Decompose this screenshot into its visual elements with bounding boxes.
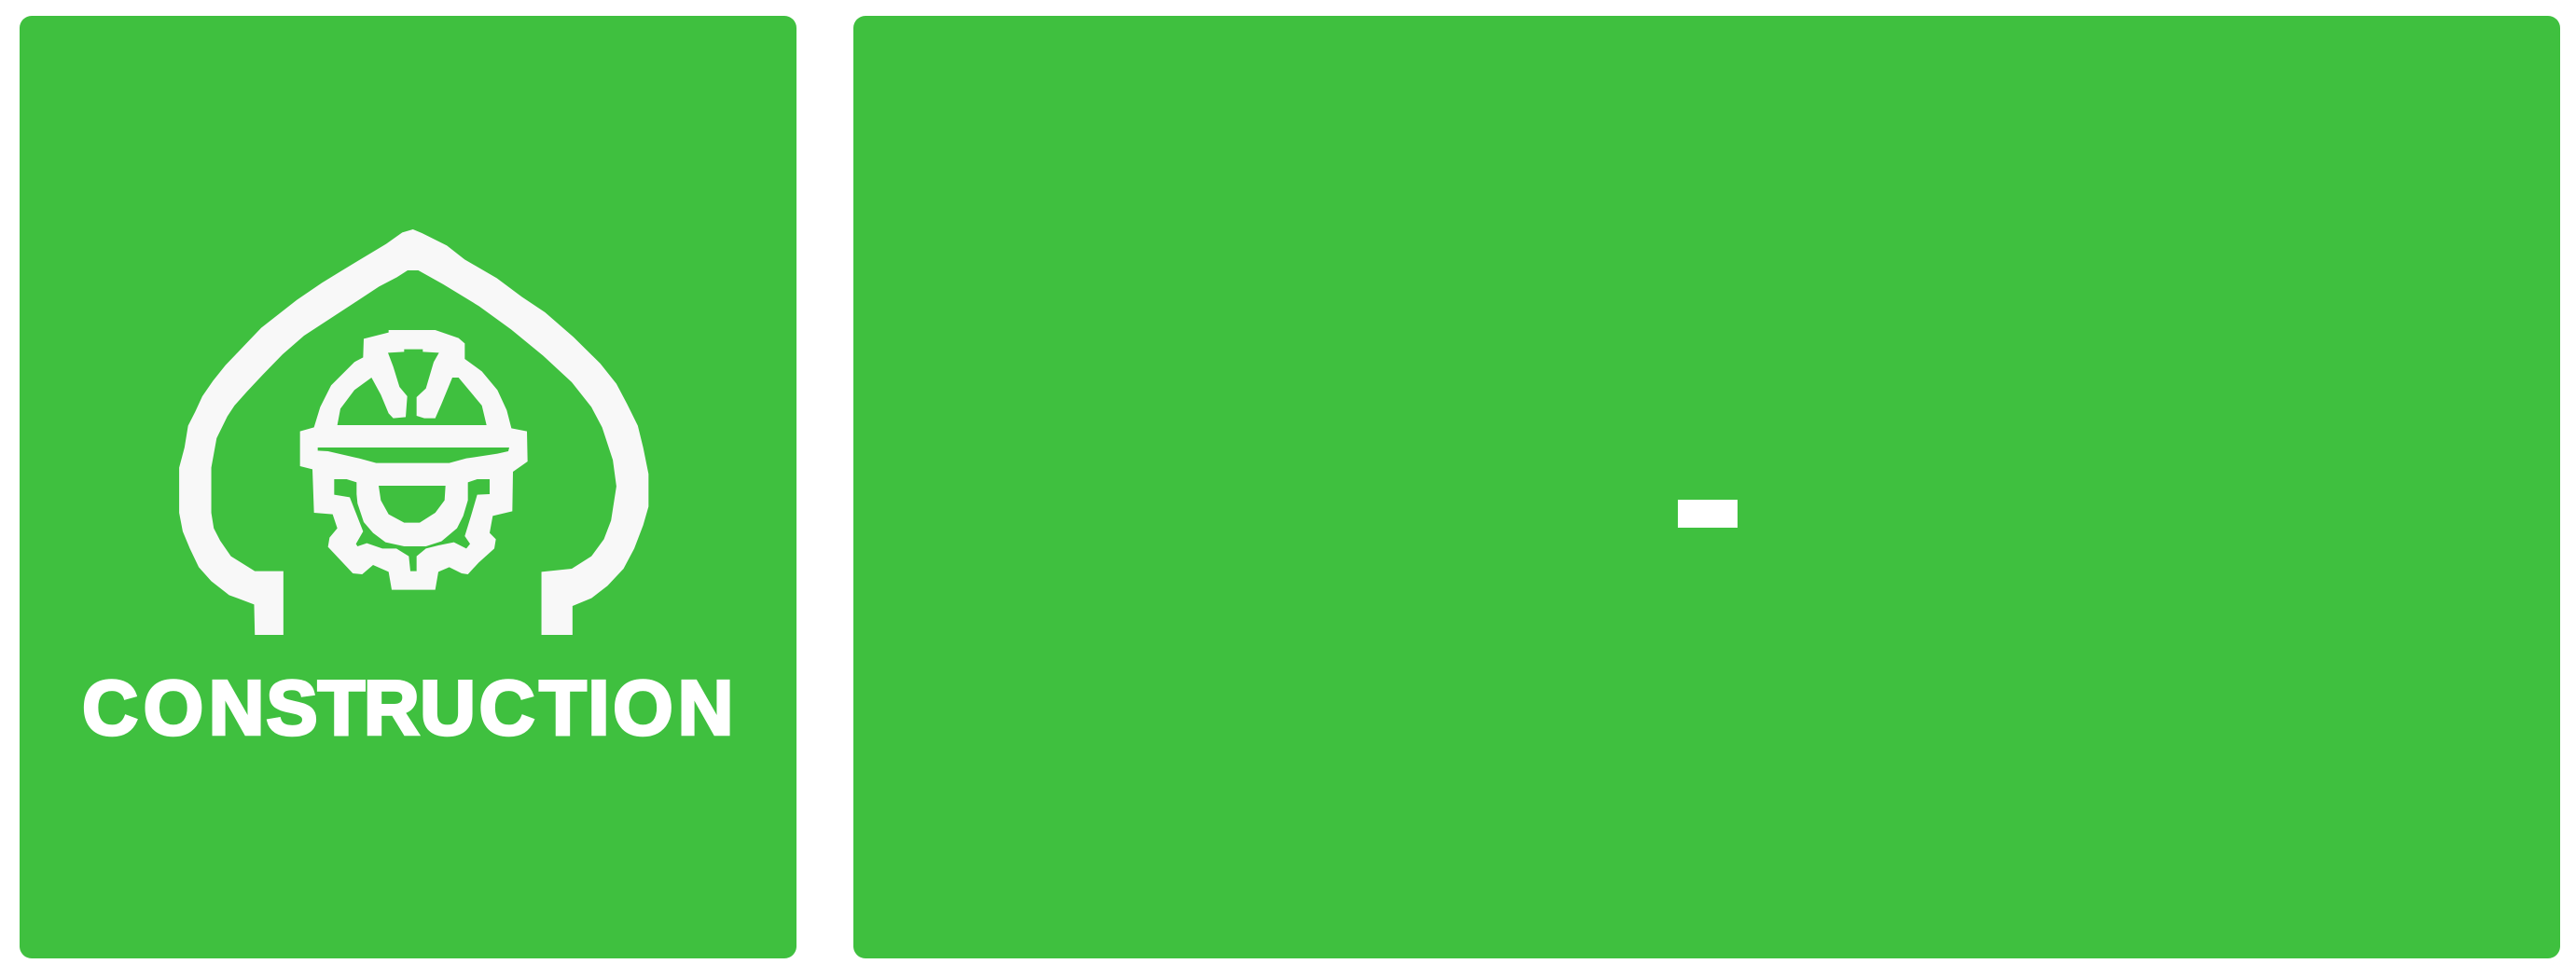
dash mark bbox=[1678, 500, 1738, 528]
panel: left logo card bbox=[20, 16, 796, 958]
icon: arch outline bbox=[179, 229, 648, 635]
panel: right card bbox=[853, 16, 2560, 958]
icon: helmet and gear bbox=[300, 330, 528, 590]
title: CONSTRUCTION: CONSTRUCTION bbox=[82, 666, 733, 751]
